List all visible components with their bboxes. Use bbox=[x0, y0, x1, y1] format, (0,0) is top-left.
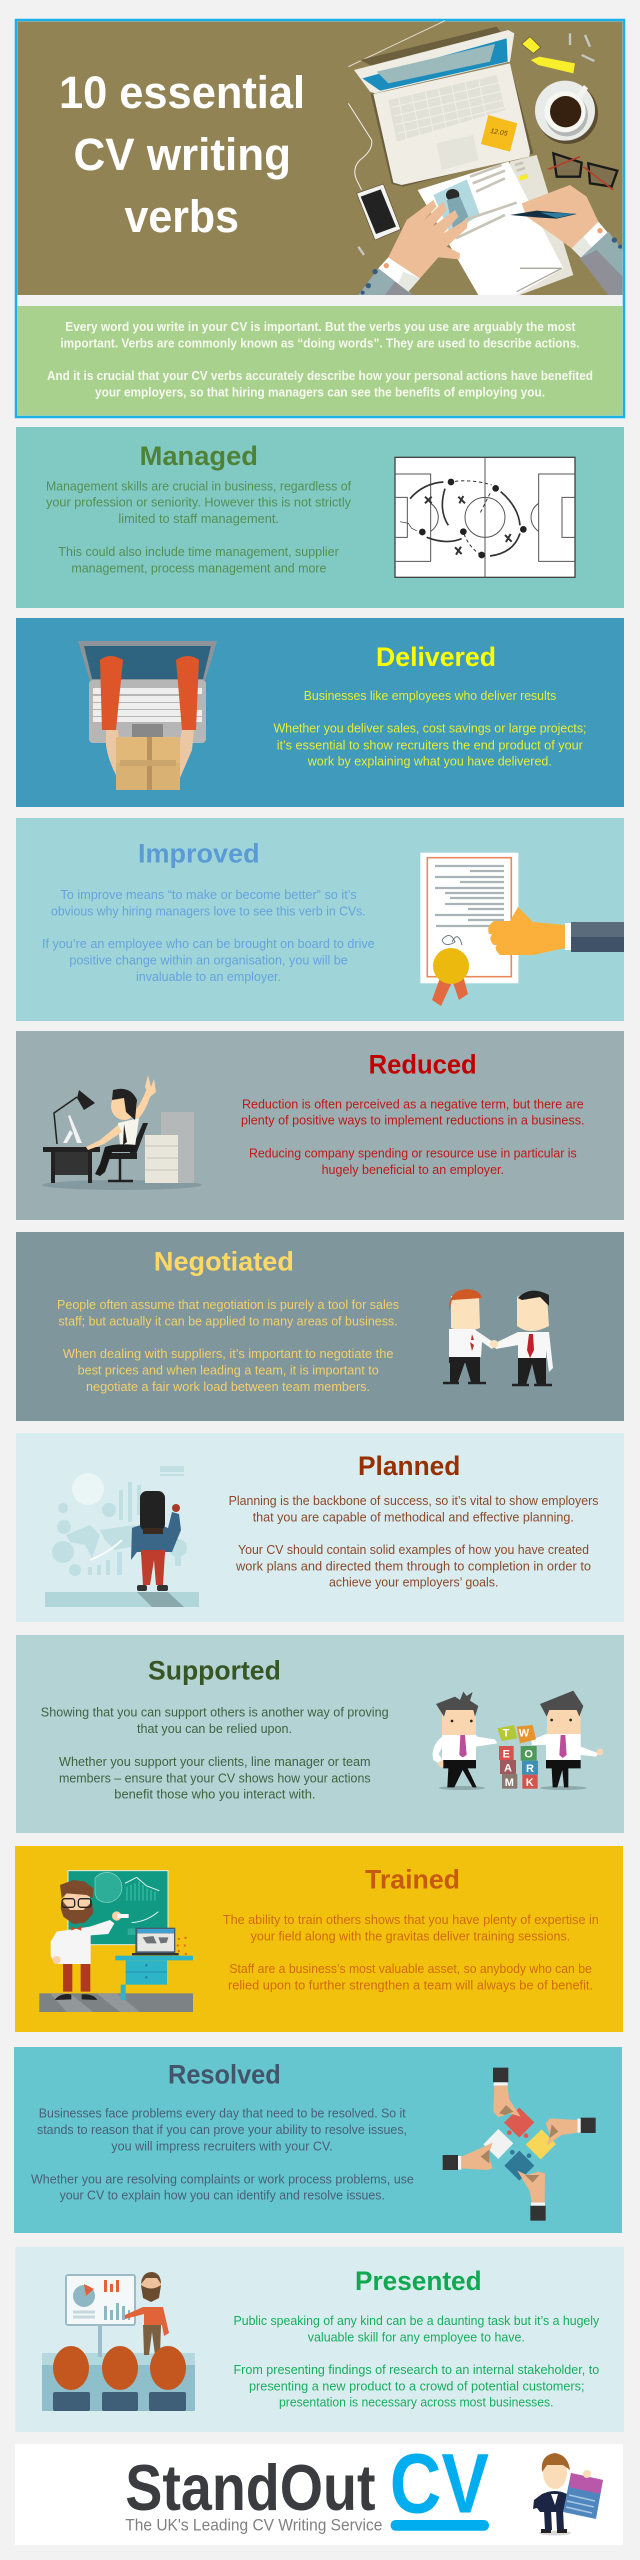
heading: supported: Supported bbox=[148, 1655, 281, 1685]
intro text: important. Verbs are commonly known as “doing words”. They are used to describe actions. bbox=[60, 335, 580, 350]
panel: delivered bbox=[16, 618, 624, 807]
text block: managed: Management skills are crucial in business, regardless of bbox=[46, 479, 351, 494]
illustration: cartoon man holding CV bbox=[533, 2453, 603, 2536]
panel: negotiated bbox=[16, 1232, 624, 1421]
panel: reduced bbox=[16, 1031, 624, 1220]
text block: resolved: Whether you are resolving complaints or work process problems, use bbox=[31, 2171, 414, 2186]
text block: reduced: plenty of positive ways to implement reductions in a business. bbox=[241, 1113, 584, 1128]
text block: resolved: Businesses face problems every day that need to be resolved. So it bbox=[39, 2106, 406, 2121]
text block: presented: presenting a new product to a crowd of potential customers; bbox=[249, 2379, 584, 2394]
illustration: teamwork blocks: W bbox=[519, 1728, 530, 1740]
text block: resolved: you will impress recruiters with your CV. bbox=[111, 2138, 333, 2153]
illustration: office worker with paper stacks bbox=[42, 1075, 202, 1190]
text block: negotiated: negotiate a fair work load between team members. bbox=[86, 1379, 370, 1394]
illustration: teamwork blocks: K bbox=[526, 1777, 534, 1789]
text block: planned: achieve your employers’ goals. bbox=[329, 1575, 498, 1590]
panel: trained bbox=[15, 1846, 623, 2032]
text block: delivered: work by explaining what you have delivered. bbox=[307, 754, 552, 769]
panel: improved bbox=[16, 818, 624, 1021]
intro text: Every word you write in your CV is important. But the verbs you use are arguably the most bbox=[65, 319, 576, 334]
text block: improved: If you’re an employee who can be brought on board to drive bbox=[42, 936, 375, 951]
logo: StandOut CV bbox=[125, 2437, 489, 2535]
text block: presented: Public speaking of any kind can be a daunting task but it’s a hugely bbox=[234, 2313, 600, 2328]
text block: trained bbox=[223, 1912, 599, 1992]
heading: trained: Trained bbox=[365, 1865, 460, 1895]
text block: reduced: Reducing company spending or resource use in particular is bbox=[249, 1146, 577, 1161]
heading: managed: Managed bbox=[140, 441, 258, 471]
intro text: your employers, so that hiring managers can see the benefits of employing you. bbox=[95, 385, 545, 400]
panel: managed bbox=[16, 427, 624, 608]
illustration: teamwork blocks: M bbox=[505, 1777, 514, 1789]
title: 10 essential bbox=[59, 67, 305, 118]
panel: hero bbox=[16, 20, 624, 417]
text block: planned: that you are capable of methodical and effective planning. bbox=[253, 1509, 574, 1524]
illustration: laptop and parcel bbox=[78, 641, 217, 790]
text block: presented: valuable skill for any employee to have. bbox=[308, 2329, 525, 2344]
panel: planned bbox=[16, 1433, 624, 1622]
illustration: teamwork blocks: E bbox=[503, 1748, 510, 1760]
heading: improved: Improved bbox=[138, 838, 260, 868]
text block: supported bbox=[41, 1705, 389, 1802]
illustration: teamwork blocks: R bbox=[526, 1763, 534, 1775]
illustration: teamwork blocks bbox=[433, 1691, 603, 1790]
panel: supported bbox=[16, 1635, 624, 1833]
text block: negotiated bbox=[57, 1297, 399, 1394]
text block: trained: The ability to train others shows that you have plenty of expertise in bbox=[223, 1912, 599, 1927]
logo: StandOut CV: StandOut bbox=[125, 2451, 376, 2524]
illustration: laptop desk with CV: 12.05 bbox=[490, 128, 508, 138]
illustration: two men shaking hands bbox=[443, 1289, 553, 1385]
illustration: teamwork blocks: A bbox=[504, 1762, 512, 1774]
text block: managed: your profession or seniority. However this is not strictly bbox=[46, 495, 351, 510]
text block: improved: obvious why hiring managers love to see this verb in CVs. bbox=[51, 903, 366, 918]
illustration: teamwork blocks: T bbox=[503, 1728, 510, 1740]
text block: resolved: stands to reason that if you can prove your ability to resolve issues, bbox=[37, 2122, 407, 2137]
text block: presented: From presenting findings of research to an internal stakeholder, to bbox=[234, 2362, 599, 2377]
text block: resolved bbox=[31, 2106, 414, 2203]
text block: planned: Planning is the backbone of success, so it’s vital to show employers bbox=[229, 1493, 599, 1508]
text block: trained: your field along with the gravitas deliver training sessions. bbox=[251, 1928, 570, 1943]
heading: planned: Planned bbox=[358, 1451, 460, 1481]
title: verbs bbox=[124, 191, 239, 242]
text block: improved bbox=[42, 887, 375, 984]
illustration: certificate and hand bbox=[420, 853, 624, 1006]
text block: resolved: your CV to explain how you can identify and resolve issues. bbox=[60, 2188, 385, 2203]
text block: improved: positive change within an organisation, you will be bbox=[69, 953, 348, 968]
text block: delivered: Businesses like employees who deliver results bbox=[304, 688, 557, 703]
logo: StandOut CV: The UK's Leading CV Writing Service bbox=[125, 2517, 382, 2535]
text block: trained: relied upon to further strengthen a team will always be of benefit. bbox=[228, 1977, 593, 1992]
heading: delivered: Delivered bbox=[376, 642, 496, 672]
text block: improved: invaluable to an employer. bbox=[136, 969, 281, 984]
text block: negotiated: staff; but actually it can be applied to many areas of business. bbox=[58, 1313, 398, 1328]
text block: delivered: it’s essential to show recruiters the end product of your bbox=[277, 737, 583, 752]
title bbox=[59, 67, 305, 242]
title: CV writing bbox=[74, 129, 291, 180]
text block: planned: work plans and directed them through to completion in order to bbox=[235, 1559, 591, 1574]
panel: logo footer bbox=[15, 2437, 623, 2545]
text block: reduced: hugely beneficial to an employer. bbox=[322, 1162, 504, 1177]
panel: resolved bbox=[14, 2047, 622, 2233]
text block: managed: management, process management and more bbox=[71, 560, 327, 575]
text block: negotiated: best prices and when leading a team, it is important to bbox=[78, 1363, 379, 1378]
illustration: trainer at a chalkboard bbox=[39, 1871, 193, 2012]
heading: presented: Presented bbox=[355, 2266, 482, 2296]
illustration: teamwork blocks: O bbox=[524, 1748, 533, 1760]
heading: reduced: Reduced bbox=[369, 1049, 477, 1079]
intro text bbox=[47, 319, 593, 400]
text block: presented bbox=[234, 2313, 600, 2410]
illustration: laptop desk with CV bbox=[348, 21, 623, 295]
text block: supported: members – ensure that your CV shows how your actions bbox=[59, 1770, 371, 1785]
illustration: four hands with jigsaw pieces bbox=[443, 2068, 596, 2221]
text block: negotiated: People often assume that negotiation is purely a tool for sales bbox=[57, 1297, 399, 1312]
text block: planned bbox=[229, 1493, 599, 1590]
text block: managed: limited to staff management. bbox=[118, 511, 279, 526]
text block: planned: Your CV should contain solid examples of how you have created bbox=[238, 1542, 589, 1557]
panel: presented bbox=[16, 2247, 624, 2432]
illustration: man planning on a wall bbox=[45, 1466, 199, 1607]
heading: resolved: Resolved bbox=[168, 2059, 281, 2089]
text block: negotiated: When dealing with suppliers, it’s important to negotiate the bbox=[63, 1346, 394, 1361]
text block: reduced bbox=[241, 1096, 584, 1177]
text block: supported: Whether you support your clients, line manager or team bbox=[59, 1754, 371, 1769]
text block: supported: benefit those who you interact with. bbox=[114, 1787, 316, 1802]
text block: managed: This could also include time management, supplier bbox=[58, 544, 339, 559]
text block: trained: Staff are a business’s most valuable asset, so anybody who can be bbox=[229, 1961, 592, 1976]
logo: StandOut CV: CV bbox=[390, 2437, 489, 2531]
text block: delivered: Whether you deliver sales, cost savings or large projects; bbox=[274, 721, 586, 736]
text block: improved: To improve means “to make or become better” so it’s bbox=[60, 887, 357, 902]
heading: negotiated: Negotiated bbox=[154, 1247, 294, 1277]
text block: supported: Showing that you can support others is another way of proving bbox=[41, 1705, 389, 1720]
text block: reduced: Reduction is often perceived as a negative term, but there are bbox=[242, 1096, 584, 1111]
text block: managed bbox=[46, 479, 351, 575]
text block: supported: that you can be relied upon. bbox=[137, 1721, 292, 1736]
illustration: presenter and audience bbox=[42, 2272, 195, 2411]
text block: delivered bbox=[274, 688, 586, 769]
text block: presented: presentation is necessary across most businesses. bbox=[279, 2395, 554, 2410]
illustration: football tactics board bbox=[395, 457, 575, 577]
